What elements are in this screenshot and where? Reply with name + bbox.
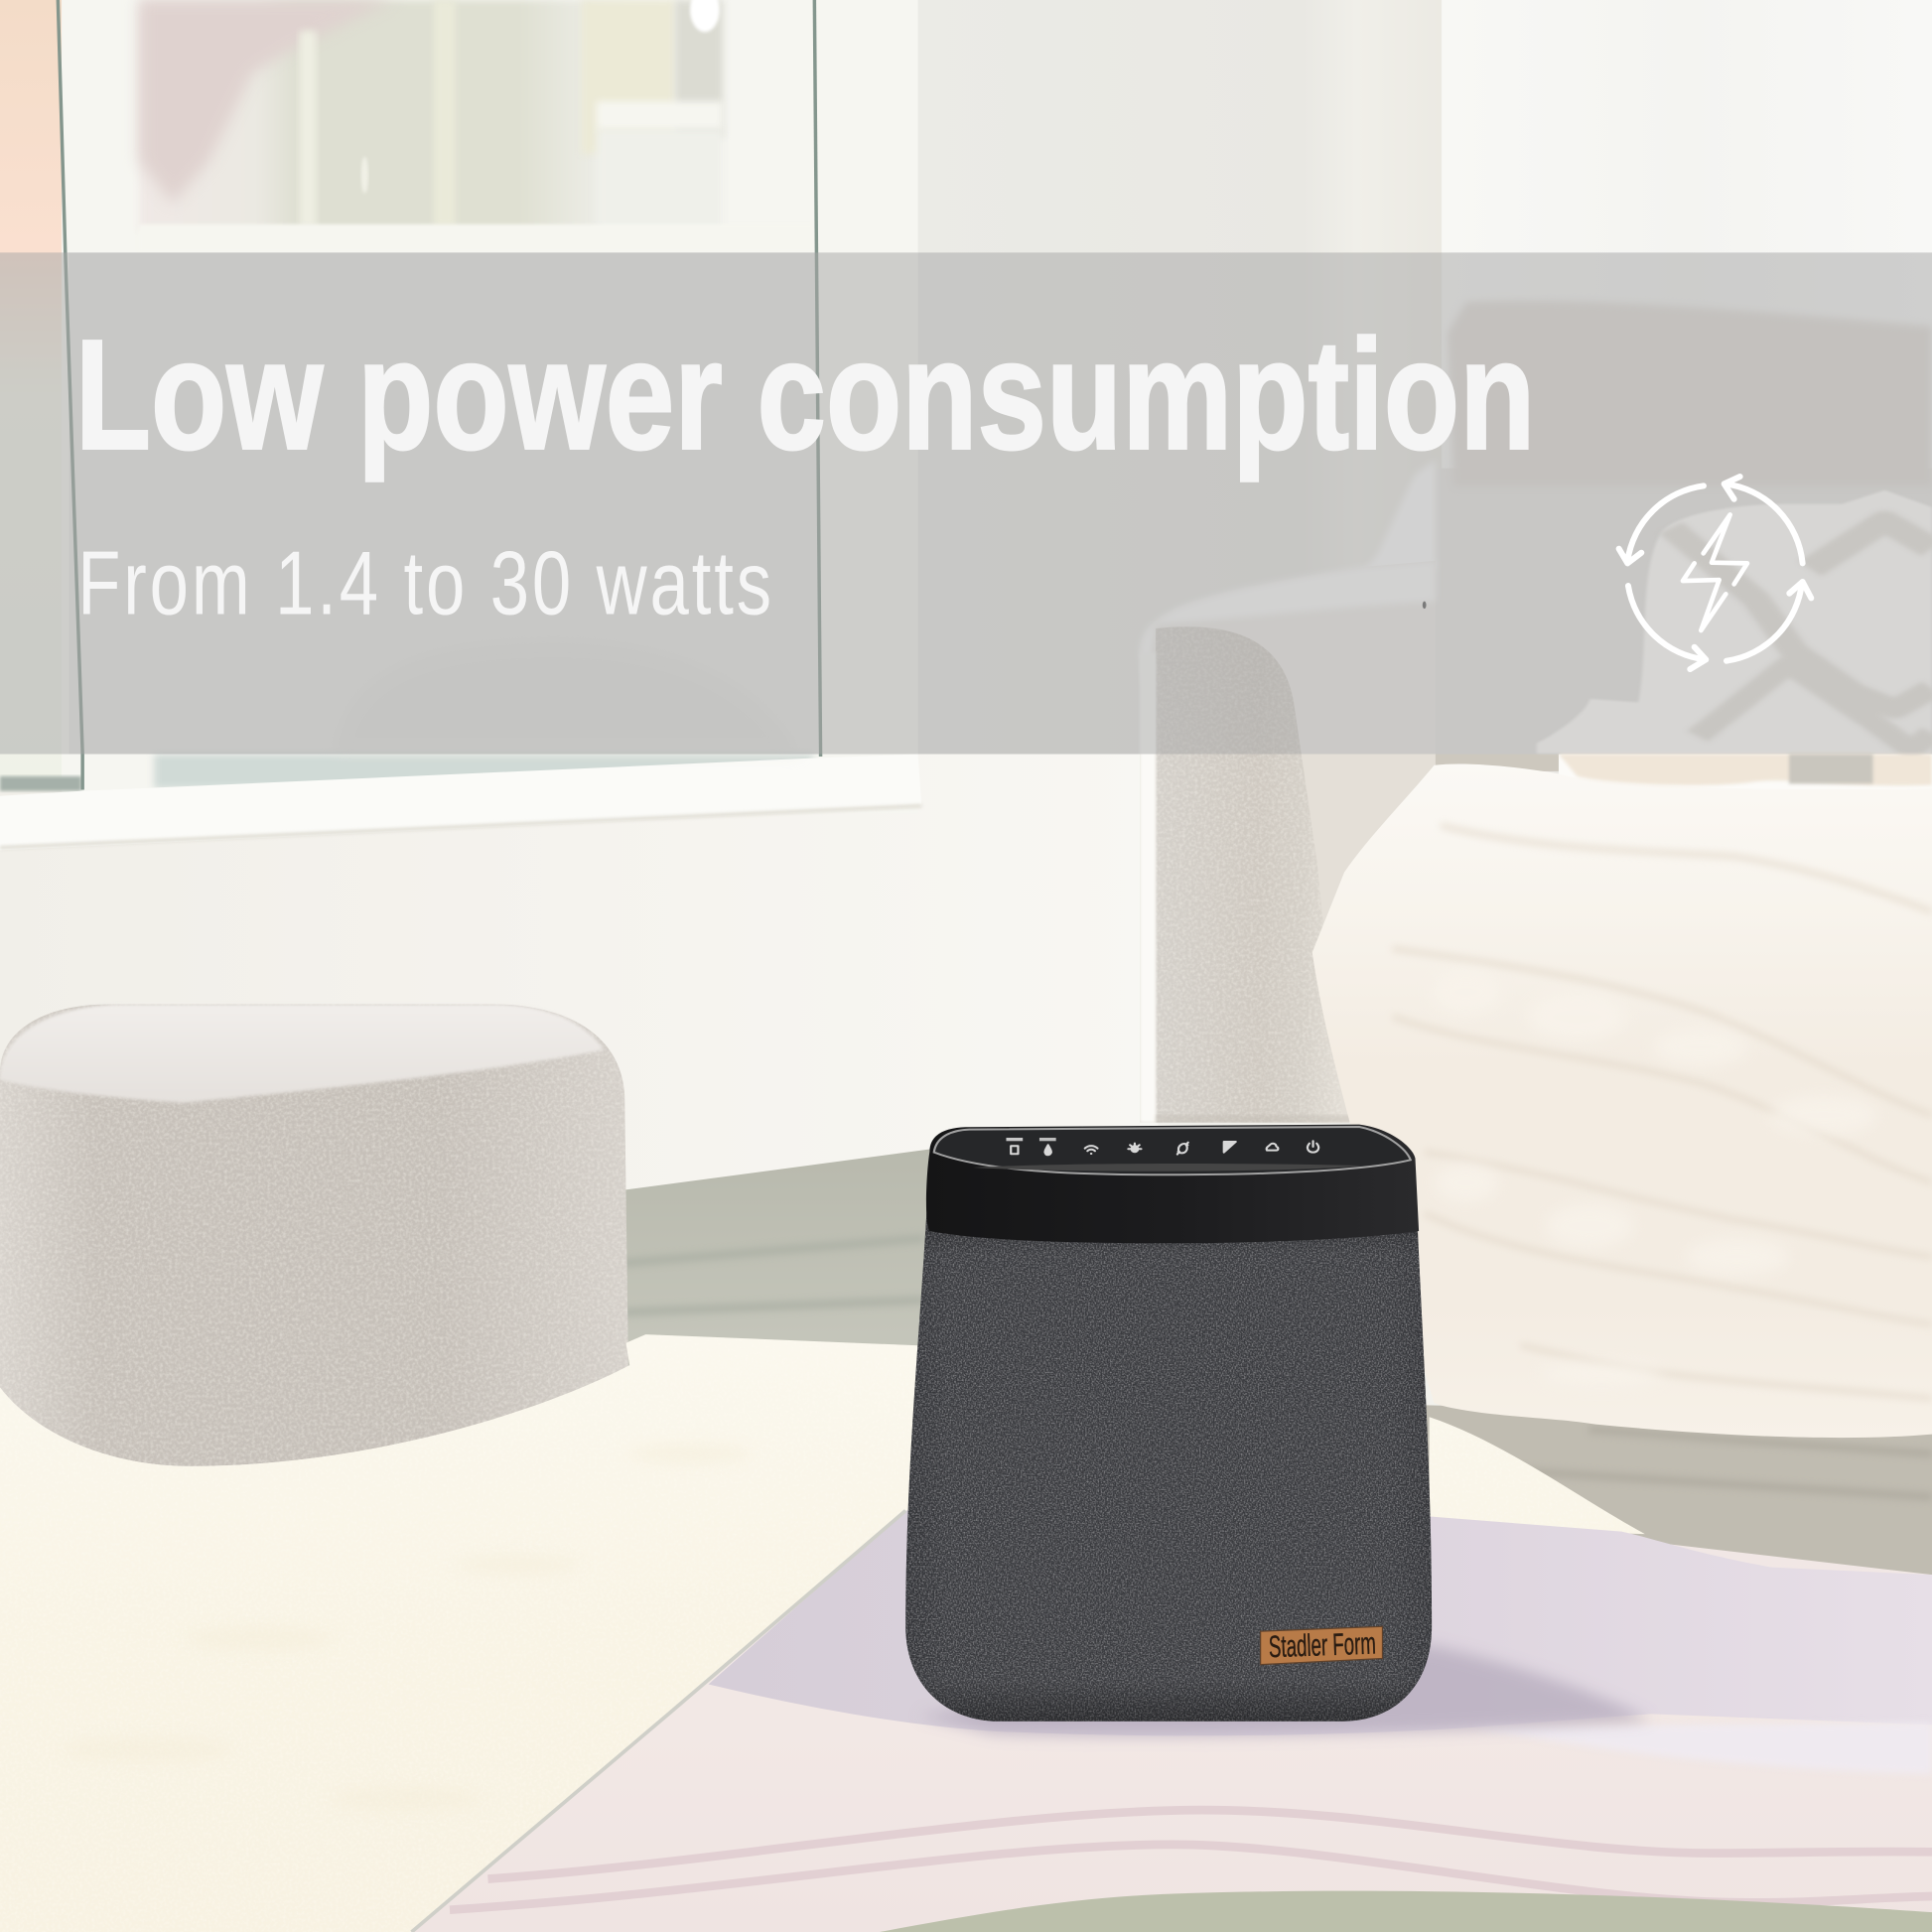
faded car shape behind glass — [333, 640, 801, 755]
cap outer — [926, 1125, 1419, 1243]
icon: energy cycle with lightning bolt — [1619, 477, 1811, 669]
window frame — [62, 0, 918, 813]
sofa wedge cushion — [1365, 460, 1436, 569]
pane seen through banner — [69, 252, 818, 755]
small dark speck on sofa — [1423, 602, 1427, 609]
pillow on banner — [1537, 490, 1932, 754]
shag rug tufts — [62, 1445, 752, 1811]
window sill — [0, 755, 921, 850]
outside view strip — [0, 0, 67, 788]
icon: cycle arrows — [1619, 477, 1811, 669]
curtain — [1442, 0, 1932, 763]
pillow fringe — [1559, 755, 1932, 785]
pillow chevrons — [1671, 521, 1932, 751]
subtitle: From 1.4 to 30 watts — [77, 533, 771, 634]
pouf — [0, 1004, 628, 1466]
wall lower — [0, 755, 1159, 1210]
device fabric body — [905, 1213, 1432, 1722]
brand tag — [1261, 1625, 1382, 1665]
rug base — [412, 1511, 1932, 1932]
wall upper — [911, 0, 1453, 763]
sofa seat gap — [1436, 755, 1565, 771]
sofa seat cushion — [1559, 755, 1932, 890]
rug lilac section — [709, 1511, 1932, 1735]
photo: room background — [0, 0, 1932, 1210]
brand text: Stadler Form — [1268, 1625, 1376, 1664]
title: Low power consumption — [75, 308, 1535, 483]
blanket — [1312, 763, 1932, 1438]
shag rug — [0, 1334, 1645, 1932]
translucent banner — [0, 252, 1932, 755]
device top cap — [926, 1125, 1419, 1243]
sofa back cushion — [1448, 301, 1932, 486]
pouf body — [0, 1004, 628, 1466]
rug green stripe — [880, 1891, 1932, 1932]
rug light patch — [1471, 1723, 1932, 1774]
sofa side panel — [1436, 469, 1932, 801]
device shadow — [918, 1645, 1651, 1735]
control icons — [1006, 1138, 1318, 1155]
cap top face — [934, 1127, 1411, 1174]
pouf top — [0, 1004, 604, 1103]
rug stripes — [450, 1810, 1932, 1910]
sofa arm — [1140, 561, 1436, 1123]
window frame thin lines — [58, 0, 821, 790]
window pane — [0, 0, 818, 791]
floor — [622, 1149, 1932, 1589]
icon: lightning bolt — [1683, 514, 1747, 630]
rug edge — [412, 1511, 905, 1932]
patterned rug — [412, 1511, 1932, 1932]
blanket cable knit — [1392, 826, 1932, 1399]
humidifier device — [905, 1125, 1432, 1722]
